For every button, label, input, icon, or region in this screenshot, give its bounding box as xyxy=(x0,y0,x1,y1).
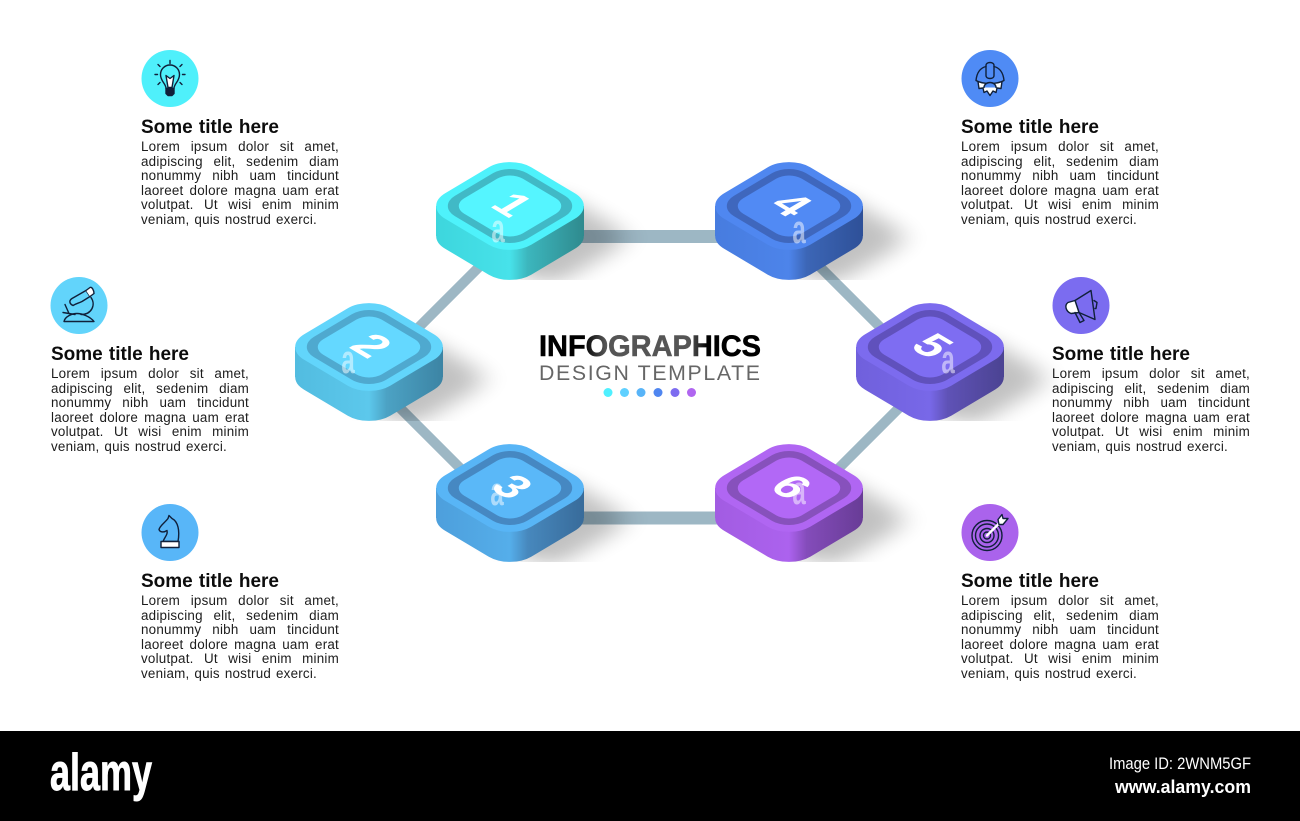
dots row xyxy=(604,388,696,397)
text block 1: Some title here xyxy=(141,117,279,138)
text block 5: Lorem ipsum dolor sit amet, xyxy=(1052,366,1250,381)
text block 4: Some title here xyxy=(961,117,1099,138)
icon: chess knight xyxy=(142,504,198,561)
block 3 xyxy=(436,444,632,562)
text block 2: veniam, quis nostrud exerci. xyxy=(51,438,227,454)
block 4: 4 xyxy=(759,186,823,224)
text block 3: adipiscing elit, sedenim diam xyxy=(141,608,339,622)
central title: DESIGN TEMPLATE xyxy=(539,361,760,385)
text block 4: adipiscing elit, sedenim diam xyxy=(961,154,1159,168)
block 2: 2 xyxy=(339,327,403,365)
text block 2: Lorem ipsum dolor sit amet, xyxy=(51,366,249,381)
text block 5: Some title here xyxy=(1052,344,1190,365)
text block 6: laoreet dolore magna uam erat xyxy=(961,636,1159,652)
text block 6: nonummy nibh uam tincidunt xyxy=(961,622,1159,637)
text block 4: Lorem ipsum dolor sit amet, xyxy=(961,139,1159,154)
central title: INFOGRAPHICS xyxy=(539,330,761,363)
text block 5: nonummy nibh uam tincidunt xyxy=(1052,395,1250,410)
footer bar xyxy=(0,731,1300,821)
icon: helmet and gear xyxy=(962,50,1018,107)
text block 3: Lorem ipsum dolor sit amet, xyxy=(141,593,339,608)
block 2 xyxy=(295,303,492,421)
text block 2 xyxy=(51,344,249,454)
text block 6: Some title here xyxy=(961,571,1099,592)
block 6: a xyxy=(792,468,806,512)
icon: microscope xyxy=(50,277,108,334)
text block 6: Lorem ipsum dolor sit amet, xyxy=(961,593,1159,608)
block 2: a xyxy=(341,337,355,381)
text block 4 xyxy=(961,117,1159,227)
block 6: 6 xyxy=(759,468,823,506)
text block 1: adipiscing elit, sedenim diam xyxy=(141,154,339,168)
text block 4: volutpat. Ut wisi enim minim xyxy=(961,197,1159,212)
text block 5: volutpat. Ut wisi enim minim xyxy=(1052,424,1250,439)
block 5: a xyxy=(941,337,955,381)
icon: target and dart xyxy=(962,504,1018,561)
text block 6: veniam, quis nostrud exerci. xyxy=(961,666,1137,680)
icon: light bulb xyxy=(142,50,198,107)
block 3: a xyxy=(490,469,504,513)
footer image id: Image ID: 2WNM5GF xyxy=(1109,754,1251,773)
text block 6: volutpat. Ut wisi enim minim xyxy=(961,651,1159,666)
text block 1: nonummy nibh uam tincidunt xyxy=(141,168,339,183)
text block 1: Lorem ipsum dolor sit amet, xyxy=(141,139,339,154)
block 5 xyxy=(856,303,1054,421)
text block 4: laoreet dolore magna uam erat xyxy=(961,182,1159,198)
text block 1 xyxy=(141,117,339,227)
block 1: a xyxy=(491,206,505,250)
block 1 xyxy=(436,162,632,280)
footer url: www.alamy.com xyxy=(1114,777,1251,797)
block 1: 1 xyxy=(480,186,544,224)
block 4: a xyxy=(792,207,806,251)
central title xyxy=(539,330,761,397)
text block 1: veniam, quis nostrud exerci. xyxy=(141,212,317,226)
text block 1: laoreet dolore magna uam erat xyxy=(141,182,339,198)
text block 1: volutpat. Ut wisi enim minim xyxy=(141,197,339,212)
text block 3: volutpat. Ut wisi enim minim xyxy=(141,651,339,666)
text block 3: Some title here xyxy=(141,571,279,592)
text block 5 xyxy=(1052,344,1250,454)
connector hexagon xyxy=(369,236,930,518)
text block 4: veniam, quis nostrud exerci. xyxy=(961,212,1137,226)
text block 2: volutpat. Ut wisi enim minim xyxy=(51,424,249,439)
text block 2: adipiscing elit, sedenim diam xyxy=(51,380,249,396)
text block 3: laoreet dolore magna uam erat xyxy=(141,636,339,652)
text block 5: laoreet dolore magna uam erat xyxy=(1052,410,1250,424)
text block 4: nonummy nibh uam tincidunt xyxy=(961,168,1159,183)
text block 6 xyxy=(961,571,1159,681)
text block 6: adipiscing elit, sedenim diam xyxy=(961,608,1159,622)
text block 2: laoreet dolore magna uam erat xyxy=(51,410,249,424)
text block 2: nonummy nibh uam tincidunt xyxy=(51,395,249,410)
footer logo: alamy xyxy=(50,744,152,802)
block 5: 5 xyxy=(900,327,964,365)
text block 5: veniam, quis nostrud exerci. xyxy=(1052,438,1228,454)
text block 3 xyxy=(141,571,339,681)
text block 3: nonummy nibh uam tincidunt xyxy=(141,622,339,637)
text block 3: veniam, quis nostrud exerci. xyxy=(141,666,317,680)
block 6 xyxy=(715,444,912,562)
icon: megaphone xyxy=(1052,277,1110,334)
text block 2: Some title here xyxy=(51,344,189,365)
block 3: 3 xyxy=(480,468,544,506)
block 4 xyxy=(715,162,912,280)
text block 5: adipiscing elit, sedenim diam xyxy=(1052,380,1250,396)
